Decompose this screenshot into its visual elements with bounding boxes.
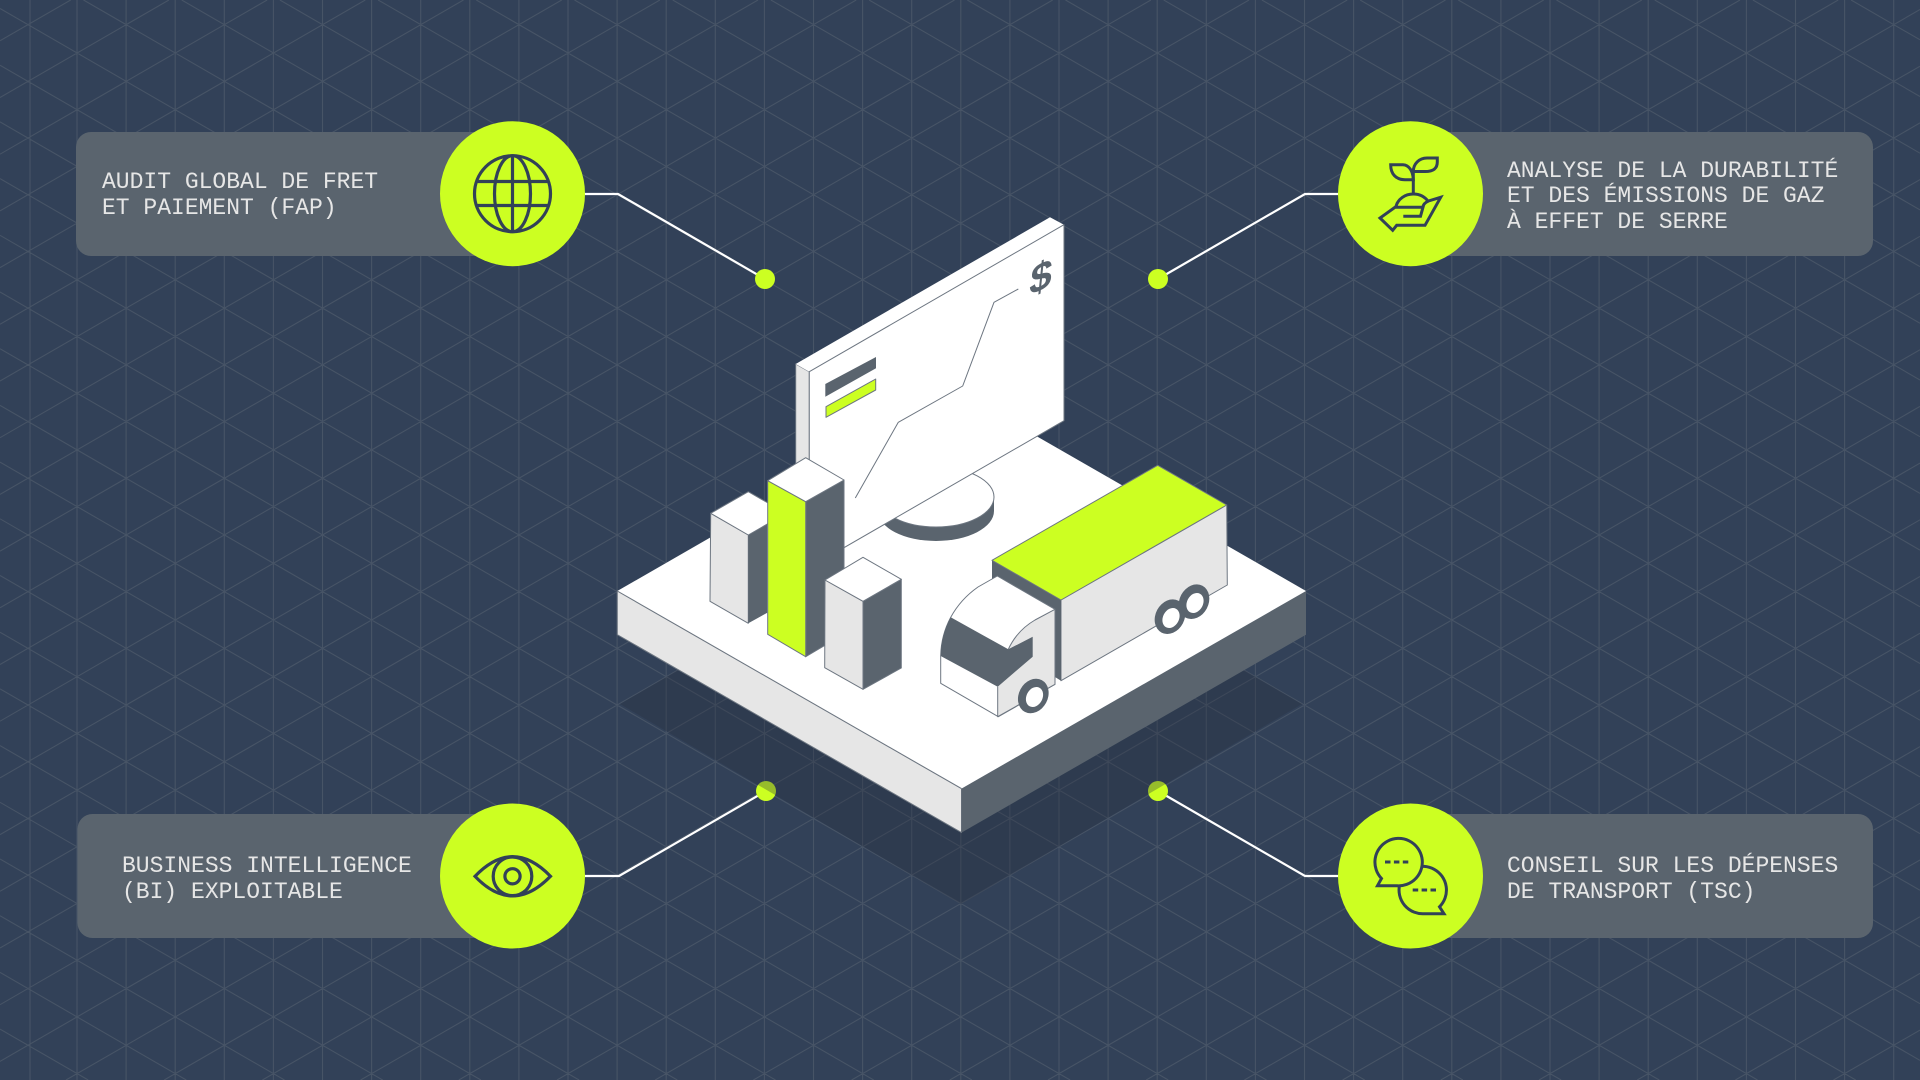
icon: plant in hand <box>1338 121 1483 266</box>
text: durabilité: ANALYSE DE LA DURABILITÉ <box>1507 157 1838 184</box>
connector: top right <box>1148 194 1338 289</box>
wheels <box>1012 579 1215 719</box>
isometric illustration <box>617 217 1306 833</box>
monitor stand <box>878 467 994 541</box>
cab <box>941 576 1055 717</box>
text: business intelligence: (BI) EXPLOITABLE <box>122 879 343 905</box>
bar: centre lime <box>768 458 844 657</box>
text: conseil: DE TRANSPORT (TSC) <box>1507 879 1755 905</box>
panel: conseil sur les dépenses <box>1338 804 1873 948</box>
text: durabilité: ET DES ÉMISSIONS DE GAZ <box>1507 182 1824 209</box>
icon: eye <box>440 804 585 948</box>
dollar sign: $ <box>1028 249 1055 306</box>
legend bar: lime <box>826 379 876 417</box>
legend bar: dark <box>825 357 876 397</box>
panel: business intelligence <box>78 804 585 948</box>
container <box>992 465 1227 681</box>
connector: top left <box>585 194 775 289</box>
platform shadow <box>620 504 1302 904</box>
text: conseil: CONSEIL SUR LES DÉPENSES <box>1507 852 1838 879</box>
text: durabilité: À EFFET DE SERRE <box>1507 208 1728 235</box>
panel: audit global de fret <box>76 121 585 266</box>
monitor with chart <box>796 217 1064 568</box>
text: business intelligence: BUSINESS INTELLIGENCE <box>122 853 412 879</box>
truck <box>941 465 1227 719</box>
connector: bottom left <box>585 781 776 876</box>
connector: bottom right <box>1148 781 1338 876</box>
icon: chat bubbles <box>1338 804 1483 948</box>
panel: analyse de la durabilité <box>1338 121 1873 266</box>
icon: globe <box>440 121 585 266</box>
text: audit global: ET PAIEMENT (FAP) <box>102 195 337 221</box>
platform <box>617 393 1306 833</box>
bar: right <box>825 557 901 689</box>
text: audit global: AUDIT GLOBAL DE FRET <box>102 169 378 195</box>
line chart <box>855 289 1018 498</box>
bar: left <box>710 492 786 623</box>
